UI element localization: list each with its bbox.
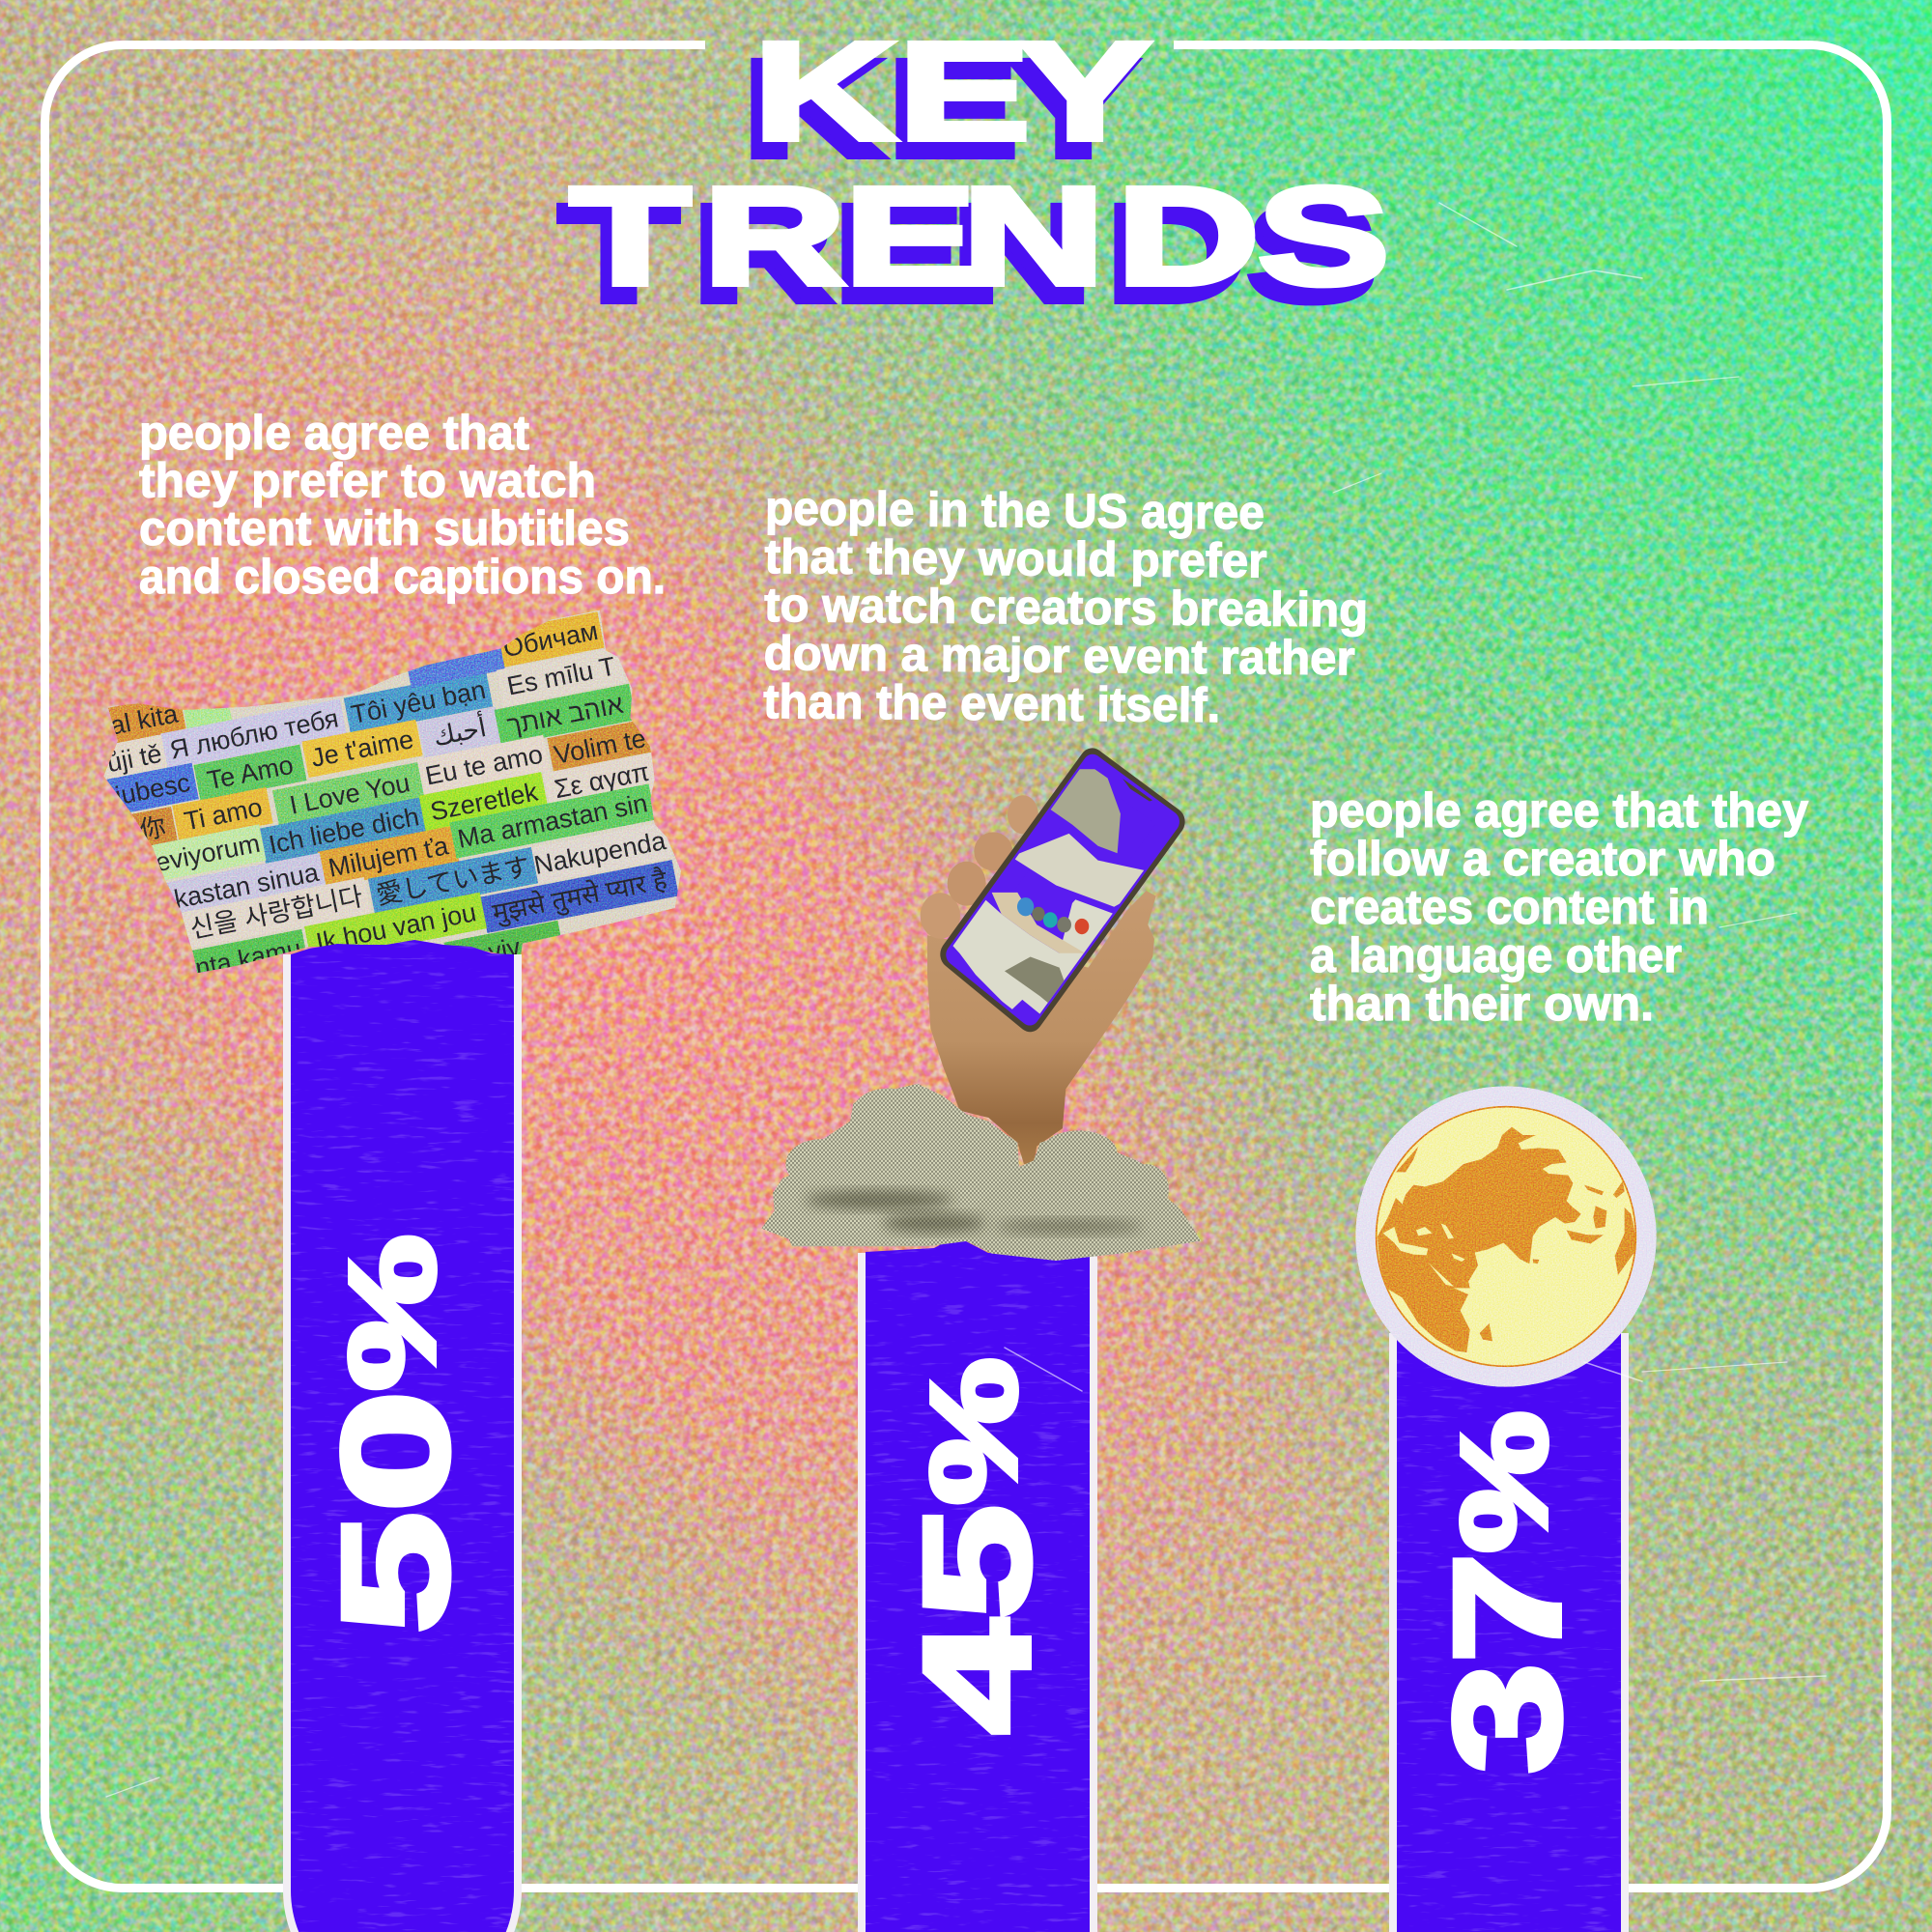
percent: 37%: 37 <box>1423 1552 1591 1774</box>
collage: torn paper of "I love you" translations: Σε αγαπ <box>552 757 652 804</box>
collage: torn paper of "I love you" translations: Обичам <box>500 616 601 663</box>
bar surface texture <box>291 942 1621 1932</box>
collage: torn paper of "I love you" translations: Volim te <box>552 724 648 770</box>
collage: torn paper of "I love you" translations: 愛しています <box>374 852 532 910</box>
bar: 50% <box>283 940 522 1932</box>
collage: torn paper of "I love you" translations: Tôi yêu bạn <box>349 675 488 729</box>
collage: torn paper of "I love you" translations: Milujem ťa <box>326 831 451 883</box>
phone <box>950 762 1172 1017</box>
title shadow: TRENDS <box>558 177 1378 331</box>
title white face <box>570 14 1389 314</box>
collage: torn paper of "I love you" translations: kastan sinua <box>172 858 322 914</box>
globe grain <box>1352 1082 1662 1391</box>
text block: 37% description: creates content in <box>1310 880 1709 934</box>
collage: torn paper of "I love you" translations: 你 <box>137 812 168 845</box>
collage: torn paper of "I love you" translations: Ma armastan sin <box>455 788 650 854</box>
text block: 45% description: than the event itself. <box>763 674 1220 732</box>
collage: torn paper of "I love you" translations: 신을 사랑합니다 <box>187 882 365 944</box>
title: KEY TRENDS <box>558 14 1389 331</box>
text block: 50% description: content with subtitles <box>139 501 630 555</box>
collage: torn paper of "I love you" translations <box>97 599 696 987</box>
text block: 37% description: than their own. <box>1310 977 1654 1031</box>
collage: torn paper of "I love you" translations: Te Amo <box>205 751 296 795</box>
illustration: hand holding phone above clouds <box>734 762 1236 1279</box>
collage: torn paper of "I love you" translations: मुझसे तुमसे प्यार है <box>490 865 670 929</box>
seas <box>1383 1224 1465 1287</box>
title shadow: KEY <box>742 32 1139 186</box>
percent: 50%: % <box>325 1235 459 1390</box>
title shadow <box>558 32 1378 331</box>
hand <box>921 795 1156 1164</box>
collage: torn paper of "I love you" translations: ůji tě <box>104 739 164 778</box>
collage: torn paper of "I love you" translations: أحبك <box>430 709 489 752</box>
collage: torn paper of "I love you" translations: Eu te amo <box>423 740 545 790</box>
bar: 45% <box>858 1241 1097 1932</box>
collage: torn paper of "I love you" translations: eviyorum <box>153 829 263 877</box>
title white face: TRENDS <box>570 159 1389 314</box>
collage: torn paper of "I love you" translations: nta kamu <box>193 934 303 982</box>
decorative paper creases <box>106 203 1826 1797</box>
text block: 50% description <box>139 406 666 604</box>
collage: torn paper of "I love you" translations: Nakupenda <box>531 826 669 880</box>
text block: 45% description: that they would prefer <box>764 529 1267 588</box>
text block: 50% description: and closed captions on. <box>139 550 666 604</box>
title white face: KEY <box>753 14 1151 169</box>
collage: torn paper of "I love you" translations: Szeretlek <box>428 777 541 826</box>
collage: torn paper of "I love you" translations: al kita <box>108 698 181 740</box>
text block: 37% description: a language other <box>1310 928 1682 982</box>
collage: torn paper of "I love you" translations: Es mīlu T <box>504 651 618 701</box>
text block: 45% description: to watch creators breaking <box>764 578 1368 637</box>
text block: 45% description: down a major event rather <box>763 626 1355 685</box>
text block: 45% description: people in the US agree <box>765 481 1264 540</box>
text block: 50% description: people agree that <box>139 406 529 460</box>
percent: 50%: 50 <box>311 1390 480 1634</box>
collage: torn paper of "I love you" translations: iubesc <box>113 768 192 810</box>
collage: torn paper of "I love you" translations: Je t'aime <box>309 724 415 773</box>
bar: 37% <box>1389 1333 1629 1932</box>
text block: 37% description: follow a creator who <box>1310 832 1776 886</box>
collage: torn paper of "I love you" translations: I Love You <box>287 768 412 820</box>
text block: 37% description <box>1310 783 1808 1031</box>
collage: torn paper of "I love you" translations: אוהב אותך <box>504 690 626 740</box>
clouds <box>761 1084 1201 1261</box>
collage: torn paper of "I love you" translations: Ich liebe dich <box>267 802 421 860</box>
percent: 37%: % <box>1436 1411 1571 1552</box>
collage: torn paper of "I love you" translations: viv <box>486 932 524 967</box>
collage: torn paper of "I love you" translations: Я люблю тебя <box>167 703 341 765</box>
percent: 45%: 45 <box>893 1505 1061 1734</box>
text block: 37% description: people agree that they <box>1310 783 1808 838</box>
collage: torn paper of "I love you" translations: Ik hou van jou <box>314 897 478 957</box>
collage: torn paper of "I love you" translations: Ti amo <box>182 792 265 837</box>
continents <box>1378 1127 1635 1352</box>
illustration: globe <box>1355 1086 1657 1387</box>
text block: 50% description: they prefer to watch <box>139 454 596 508</box>
text block: 45% description <box>763 481 1369 733</box>
percent: 45%: % <box>905 1358 1041 1505</box>
